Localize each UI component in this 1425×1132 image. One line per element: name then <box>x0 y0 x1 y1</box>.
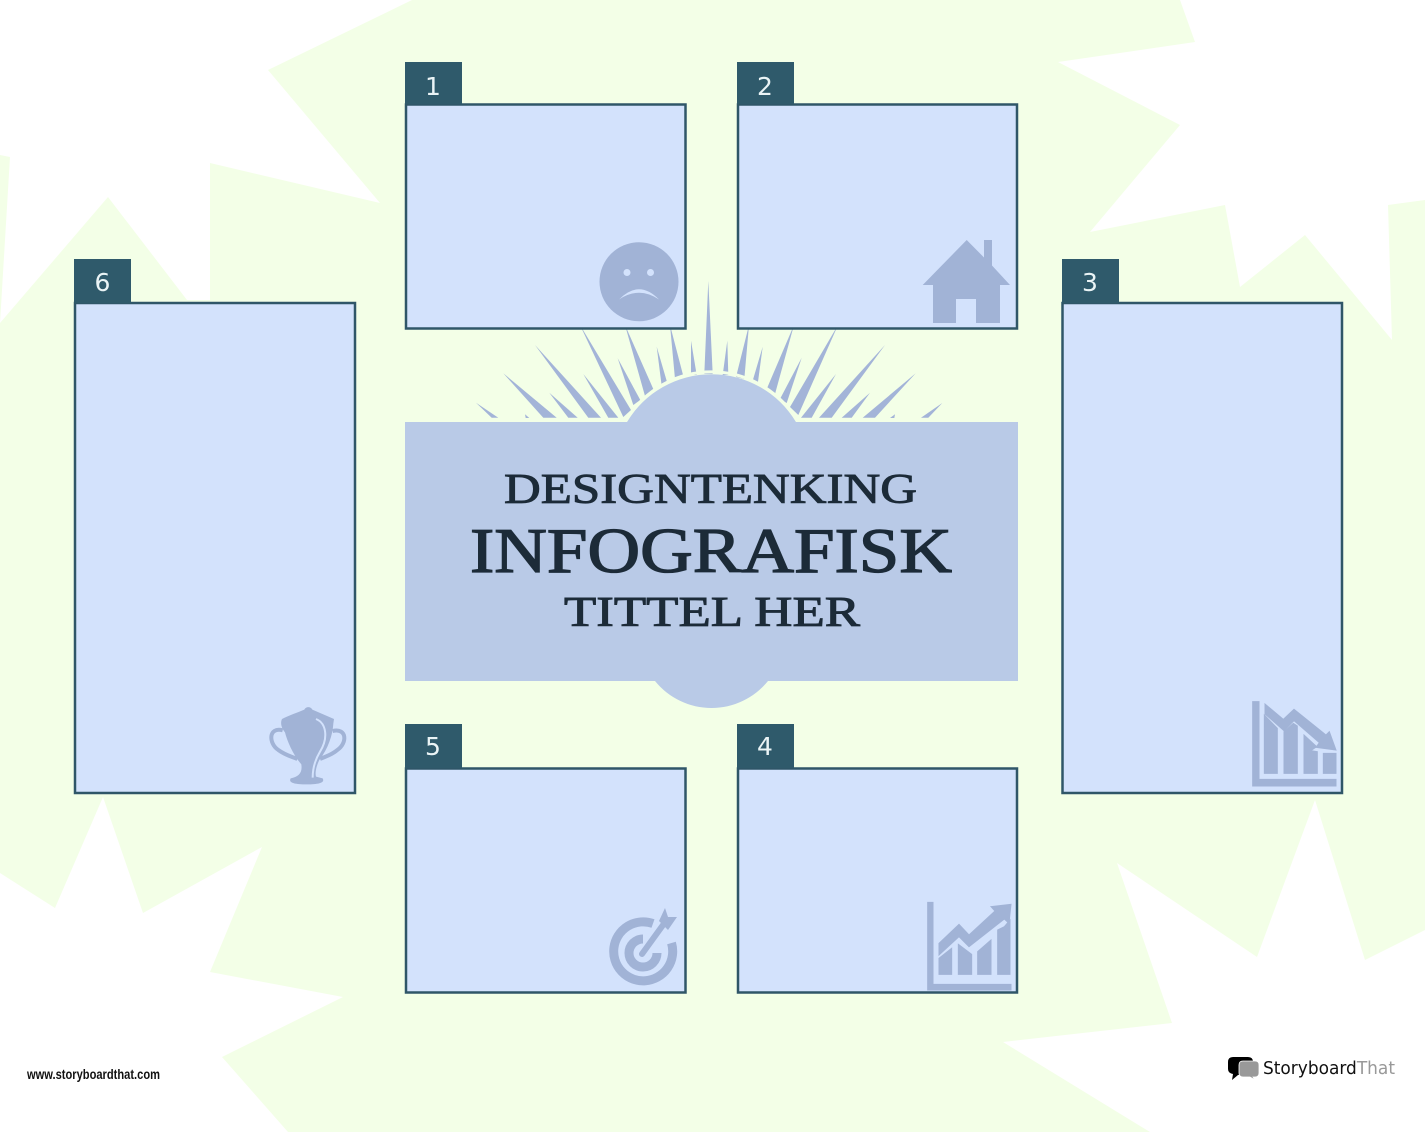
tab 5: 5 <box>425 732 441 761</box>
panel 1: sad face <box>405 62 686 328</box>
logo: StoryboardThat <box>1228 1057 1395 1080</box>
icon: rising bar chart <box>928 902 1011 990</box>
title line 1: DESIGNTENKING <box>504 466 917 513</box>
tab 2: 2 <box>757 72 773 101</box>
icon: falling bar chart <box>1253 702 1336 786</box>
tab 3: 3 <box>1082 268 1098 297</box>
tab 2 <box>737 62 794 104</box>
panel 6: trophy <box>74 259 355 793</box>
icon: black speech bubble <box>1228 1057 1253 1080</box>
tab 6 <box>74 259 131 303</box>
sunburst rays <box>476 281 942 418</box>
footer url: www.storyboardthat.com <box>26 1066 160 1082</box>
title line 3: TITTEL HER <box>564 589 861 636</box>
tab 1: 1 <box>425 72 441 101</box>
tab 1 <box>405 62 462 104</box>
panel 5: target <box>405 724 686 992</box>
logo wordmark: StoryboardThat <box>1263 1058 1395 1079</box>
panel 4: rising chart <box>737 724 1017 992</box>
tab 5 <box>405 724 462 768</box>
icon: target with arrow <box>614 908 677 981</box>
title panel <box>405 372 1018 708</box>
tab 6: 6 <box>95 268 110 297</box>
tab 4: 4 <box>757 732 773 761</box>
tab 4 <box>737 724 794 768</box>
icon: house <box>923 240 1010 323</box>
tab 3 <box>1062 259 1119 303</box>
icon: trophy <box>271 707 344 784</box>
icon: gray speech bubble <box>1239 1061 1259 1080</box>
title line 2: INFOGRAFISK <box>470 515 952 586</box>
icon: sad face <box>600 242 678 321</box>
panel 3: falling chart <box>1062 259 1342 793</box>
panel 2: house <box>737 62 1017 328</box>
